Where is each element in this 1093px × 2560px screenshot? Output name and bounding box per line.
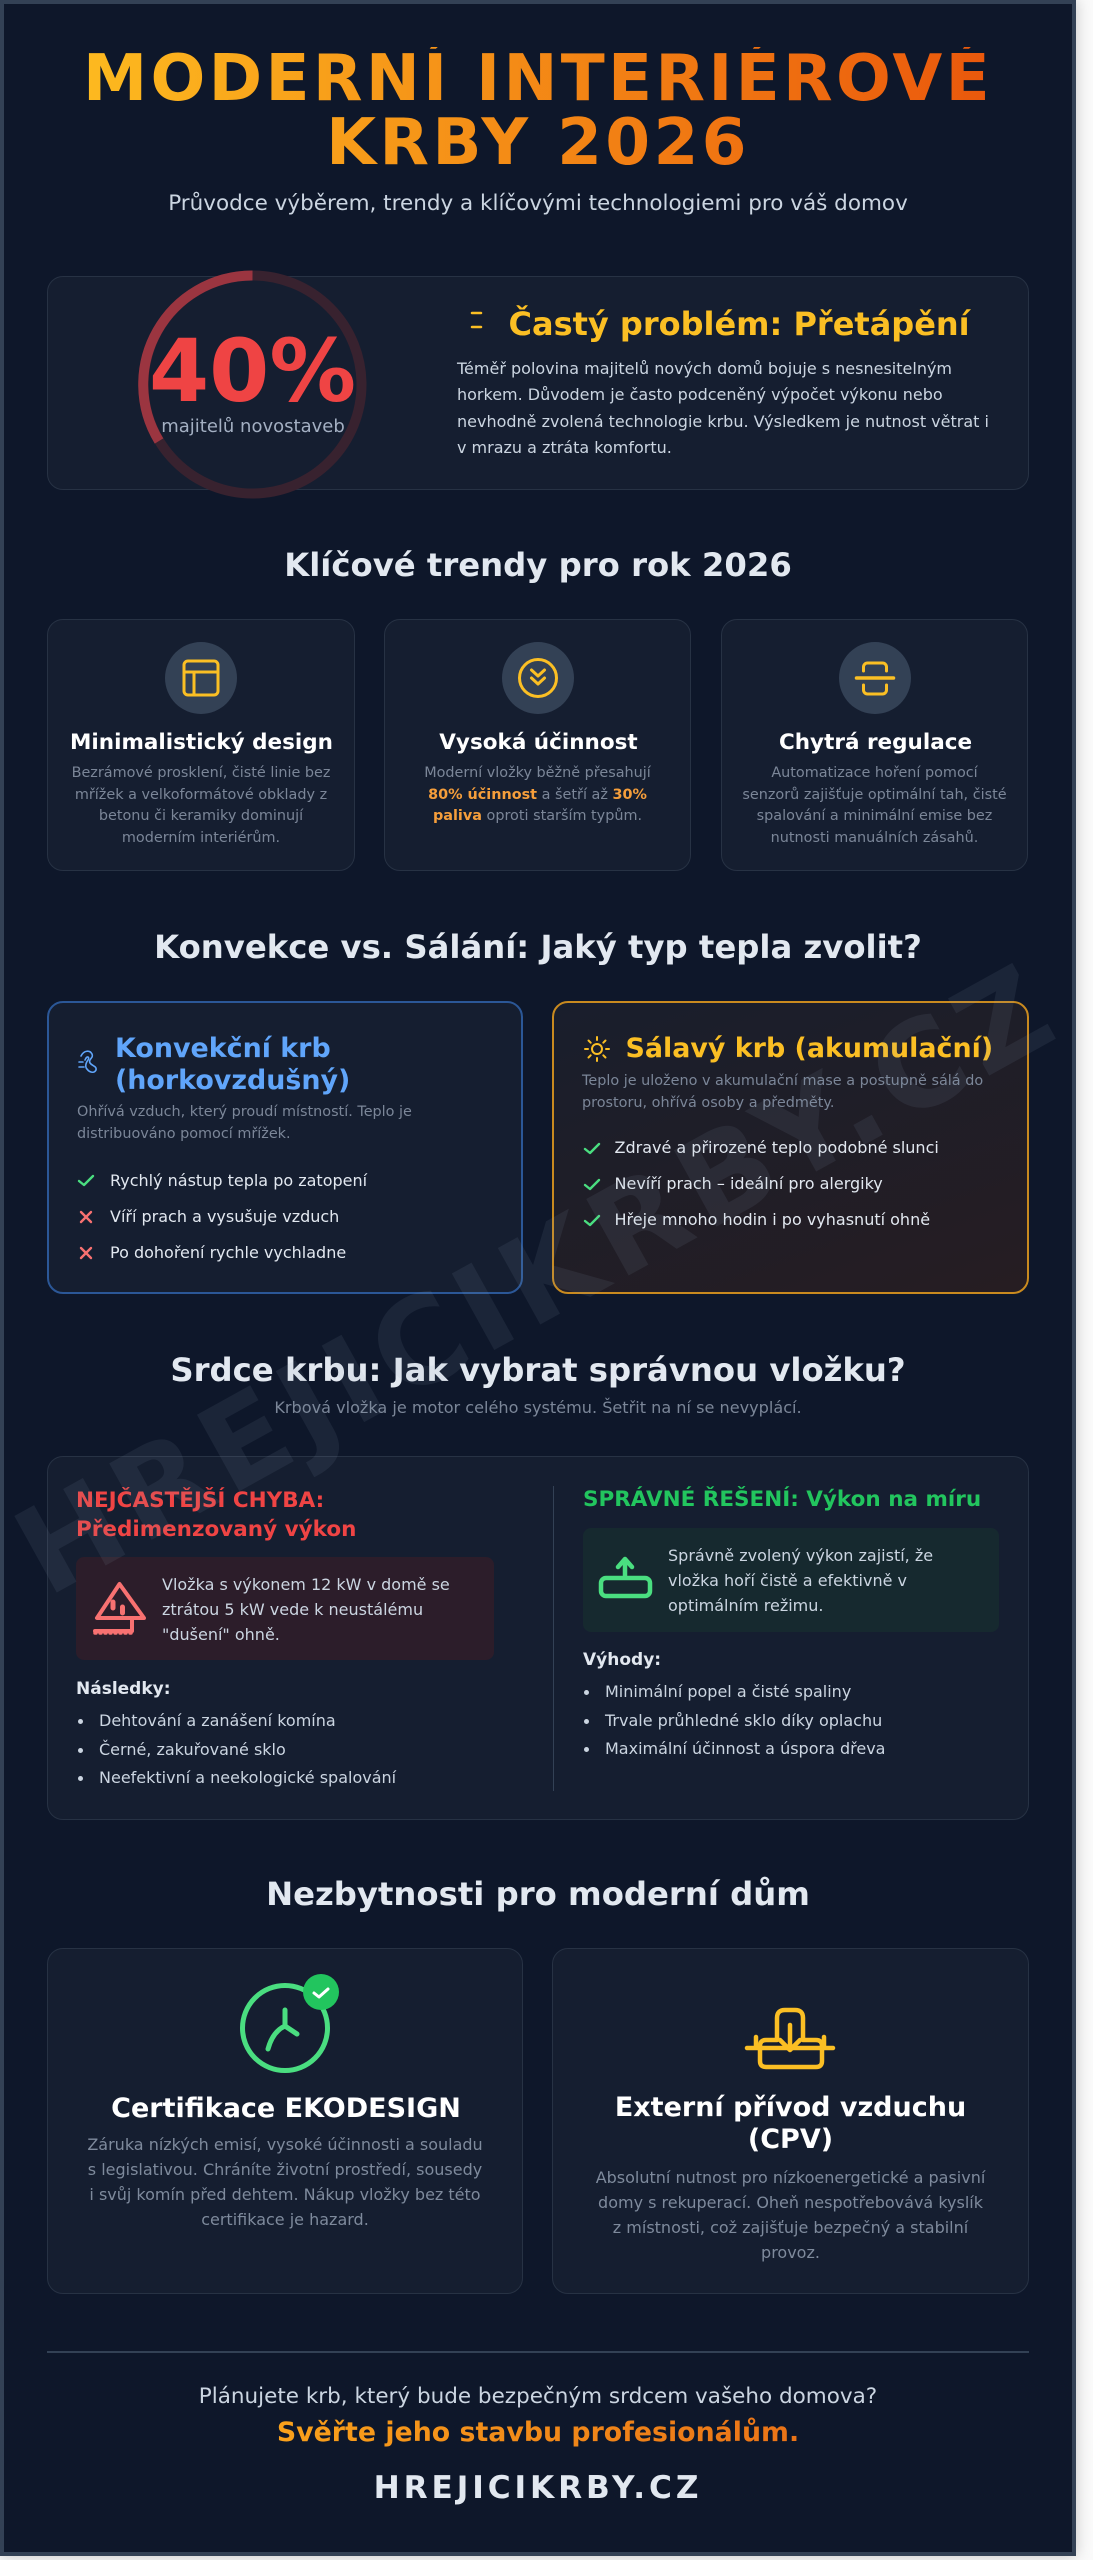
pro: no dust: Nevíří prach – ideální pro alergiky	[614, 1174, 883, 1193]
card text: mřížek a velkoformátové obklady z	[75, 786, 327, 802]
benefits heading: Výhody:	[583, 1650, 661, 1670]
card title	[615, 2092, 966, 2155]
benefit: Trvale průhledné sklo díky oplachu	[605, 1711, 882, 1730]
card text: z místnosti, což zajišťuje bezpečný a stabilní	[613, 2218, 968, 2237]
heading: convection vs radiant: Konvekce vs. Sálání: Jaký typ tepla zvolit?	[154, 928, 922, 966]
bullet	[78, 1776, 83, 1781]
problem text	[456, 359, 989, 457]
benefit: Maximální účinnost a úspora dřeva	[605, 1739, 885, 1758]
icon: cross	[80, 1246, 92, 1260]
solution callout text: optimálním režimu.	[668, 1596, 823, 1615]
pro: long warmth: Hřeje mnoho hodin i po vyhasnutí ohně	[614, 1210, 930, 1229]
icon: certified clock	[240, 1974, 339, 2073]
mistake heading: NEJČASTĚJŠÍ CHYBA:	[76, 1488, 324, 1513]
icon: warning triangle	[93, 1582, 146, 1635]
card heading: Konvekční krb	[115, 1033, 331, 1064]
description	[77, 1104, 412, 1142]
icon: warning dashes	[470, 312, 482, 328]
icon: check	[584, 1142, 600, 1154]
consequence: Neefektivní a neekologické spalování	[99, 1768, 396, 1787]
stat caption: majitelů novostaveb	[161, 416, 345, 437]
card text: nutnosti manuálních zásahů.	[771, 830, 978, 846]
stat value: 40%	[149, 322, 356, 422]
card title: Externí přívod vzduchu	[615, 2092, 966, 2123]
problem text: v mrazu a ztráta komfortu.	[457, 438, 672, 457]
panel: smart regulation	[721, 619, 1028, 871]
card title: Certifikace EKODESIGN	[111, 2093, 461, 2124]
card text: Bezrámové prosklení, čisté linie bez	[72, 765, 330, 781]
card text: senzorů zajišťuje optimální tah, čisté	[742, 786, 1007, 802]
card text	[424, 765, 651, 824]
mistake heading: Předimenzovaný výkon	[76, 1517, 356, 1542]
panel: problem	[47, 276, 1029, 490]
consequences heading: Následky:	[76, 1679, 171, 1699]
icon: check	[584, 1214, 600, 1226]
mistake heading	[76, 1487, 356, 1542]
heading: trends: Klíčové trendy pro rok 2026	[284, 546, 792, 584]
card text	[596, 2168, 986, 2262]
subtitle: Průvodce výběrem, trendy a klíčovými technologiemi pro váš domov	[168, 191, 908, 216]
card heading: (horkovzdušný)	[115, 1065, 350, 1096]
mistake callout background	[76, 1557, 494, 1660]
card text: s legislativou. Chráníte životní prostředí, sousedy	[88, 2160, 482, 2179]
card title: Vysoká účinnost	[439, 730, 638, 755]
icon: regulation	[839, 642, 911, 714]
footer divider	[47, 2351, 1029, 2353]
section subtitle: Krbová vložka je motor celého systému. Šetřit na ní se nevyplácí.	[274, 1398, 802, 1417]
card text: certifikace je hazard.	[201, 2210, 369, 2229]
panel: convection fireplace	[47, 1001, 523, 1294]
description: prostoru, ohřívá osoby a předměty.	[582, 1095, 834, 1111]
solution callout text	[668, 1546, 933, 1615]
consequence: Černé, zakuřované sklo	[99, 1740, 286, 1759]
bullet	[584, 1719, 589, 1724]
mistake callout text: "dušení" ohně.	[162, 1625, 280, 1644]
mistake callout text: Vložka s výkonem 12 kW v domě se	[162, 1575, 450, 1594]
card text: moderním interiérům.	[122, 830, 280, 846]
panel: radiant fireplace	[552, 1001, 1029, 1294]
benefit: Minimální popel a čisté spaliny	[605, 1682, 851, 1701]
problem text: Téměř polovina majitelů nových domů bojuje s nesnesitelným	[457, 359, 952, 378]
card text: Moderní vložky běžně přesahují	[424, 765, 651, 781]
mistake callout text: ztrátou 5 kW vede k neustálému	[162, 1600, 423, 1619]
watermark: HREJICIKRBY.CZ	[0, 936, 1076, 1623]
panel: minimalist design	[47, 619, 355, 871]
card title: Chytrá regulace	[779, 730, 972, 755]
card text	[87, 2135, 483, 2229]
bullet	[78, 1719, 83, 1724]
solution callout text: vložka hoří čistě a efektivně v	[668, 1571, 907, 1590]
footer brand: HREJICIKRBY.CZ	[374, 2470, 702, 2506]
column divider	[553, 1486, 554, 1791]
card text: Absolutní nutnost pro nízkoenergetické a pasivní	[596, 2168, 985, 2187]
pro: rapid heat: Rychlý nástup tepla po zatopení	[110, 1170, 367, 1190]
heading: insert: Srdce krbu: Jak vybrat správnou vložku?	[170, 1351, 906, 1389]
card text: betonu či keramiky dominují	[99, 808, 303, 824]
card text: Záruka nízkých emisí, vysoké účinnosti a souladu	[87, 2135, 483, 2154]
icon: upload arrow	[598, 1556, 652, 1598]
solution heading: SPRÁVNÉ ŘEŠENÍ: Výkon na míru	[583, 1487, 981, 1512]
bullet	[584, 1690, 589, 1695]
icon: hot air	[78, 1050, 97, 1073]
bullet	[584, 1747, 589, 1752]
ring chart: 40 percent	[138, 270, 366, 498]
description	[582, 1073, 983, 1111]
description: Teplo je uloženo v akumulační mase a postupně sálá do	[582, 1073, 983, 1089]
bullet	[78, 1748, 83, 1753]
card heading	[115, 1033, 350, 1096]
icon: sun	[584, 1036, 610, 1062]
footer call to action: Svěřte jeho stavbu profesionálům.	[277, 2417, 799, 2448]
card text: provoz.	[761, 2243, 820, 2262]
panel: high efficiency	[384, 619, 691, 871]
card text: spalování a minimální emise bez	[757, 808, 992, 824]
heading: essentials: Nezbytnosti pro moderní dům	[266, 1875, 810, 1913]
card text: Automatizace hoření pomocí	[771, 765, 978, 781]
title: MODERNÍ INTERIÉROVÉ	[83, 40, 993, 116]
card heading: Sálavý krb (akumulační)	[626, 1033, 993, 1064]
panel: external air supply	[552, 1948, 1029, 2294]
pro: healthy heat: Zdravé a přirozené teplo podobné slunci	[614, 1138, 939, 1157]
title: KRBY 2026	[326, 104, 750, 180]
panel: ekodesign	[47, 1948, 523, 2294]
card text: 80% účinnost a šetří až 30%	[428, 786, 647, 802]
card title: (CPV)	[748, 2124, 833, 2155]
card text	[742, 765, 1007, 846]
consequence: Dehtování a zanášení komína	[99, 1711, 336, 1730]
con: cools quickly: Po dohoření rychle vychladne	[110, 1242, 346, 1262]
icon: check	[78, 1174, 94, 1186]
solution callout text: Správně zvolený výkon zajistí, že	[668, 1546, 933, 1565]
title	[38, 46, 1038, 174]
description: Ohřívá vzduch, který proudí místností. Teplo je	[77, 1104, 412, 1120]
icon: air intake	[744, 2008, 836, 2070]
problem text: nevhodně zvolená technologie krbu. Výsledkem je nutnost větrat i	[457, 412, 989, 431]
card text	[72, 765, 330, 846]
mistake callout text	[162, 1575, 450, 1644]
icon: cross	[80, 1210, 92, 1224]
card title: Minimalistický design	[70, 730, 333, 755]
footer question: Plánujete krb, který bude bezpečným srdcem vašeho domova?	[199, 2384, 877, 2408]
solution callout background	[583, 1528, 999, 1632]
card text: domy s rekuperací. Oheň nespotřebovává kyslík	[598, 2193, 983, 2212]
icon: check	[584, 1178, 600, 1190]
panel: insert comparison	[47, 1456, 1029, 1820]
problem heading: Častý problém: Přetápění	[508, 305, 970, 343]
con: dust: Víří prach a vysušuje vzduch	[110, 1206, 339, 1226]
icon: efficiency	[502, 642, 574, 714]
card text: i svůj komín před dehtem. Nákup vložky bez této	[89, 2185, 481, 2204]
description: distribuováno pomocí mřížek.	[77, 1126, 291, 1142]
problem text: horkem. Důvodem je často podceněný výpočet výkonu nebo	[457, 385, 943, 404]
icon: layout	[165, 642, 237, 714]
card text: paliva oproti starším typům.	[433, 808, 642, 824]
